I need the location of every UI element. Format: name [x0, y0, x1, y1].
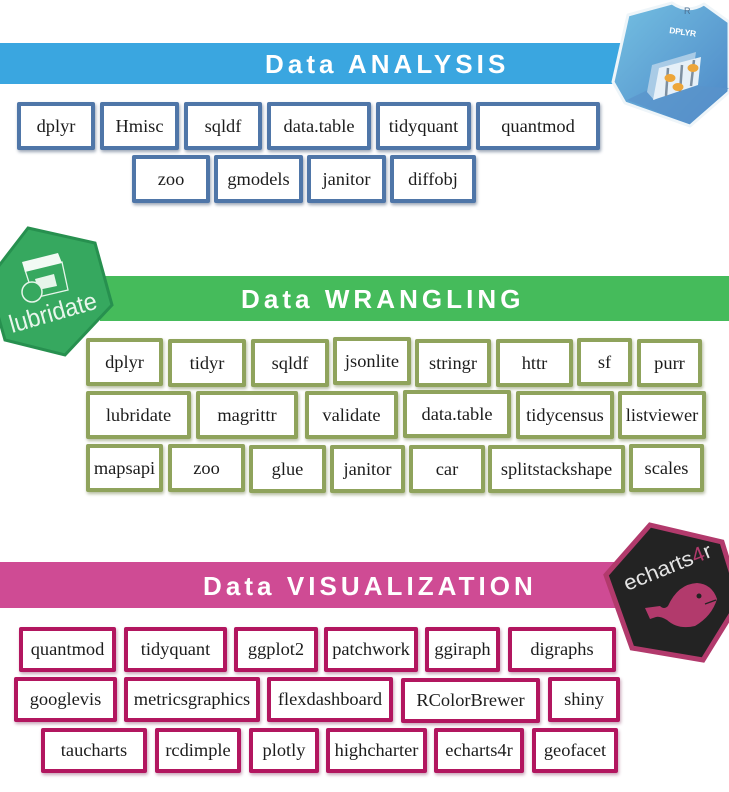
panel: analysis packages: quantmod [501, 116, 575, 136]
heading: data visualization: Data VISUALIZATION [203, 571, 537, 601]
panel: wrangling packages: scales [645, 458, 688, 478]
panel: visualization packages: digraphs [530, 639, 594, 659]
panel: analysis packages: zoo [158, 168, 184, 188]
panel: visualization packages: geofacet [544, 740, 606, 760]
panel: visualization packages: googlevis [30, 689, 101, 709]
panel: wrangling packages: sf [598, 352, 611, 372]
panel: analysis packages: Hmisc [115, 116, 164, 136]
panel: visualization packages: quantmod [31, 639, 104, 659]
panel: visualization packages: patchwork [332, 639, 410, 659]
panel: analysis packages: data.table [284, 116, 354, 136]
panel: visualization packages: ggiraph [434, 639, 491, 659]
panel: wrangling packages: purr [654, 352, 685, 372]
band: data visualization [0, 562, 622, 608]
panel: wrangling packages: lubridate [106, 404, 171, 424]
panel: visualization packages: ggplot2 [248, 639, 304, 659]
panel: visualization packages: metricsgraphics [134, 689, 250, 709]
panel: visualization packages: rcdimple [165, 740, 231, 760]
panel: wrangling packages: tidyr [190, 352, 224, 372]
panel: wrangling packages: sqldf [272, 352, 308, 372]
panel: wrangling packages [85, 337, 709, 497]
heading: data analysis: Data ANALYSIS [265, 49, 509, 79]
logo: lubridate hexagon: lubridate [6, 287, 100, 339]
panel: analysis packages: gmodels [227, 168, 290, 188]
panel: wrangling packages: validate [322, 404, 381, 424]
panel: visualization packages [13, 627, 623, 777]
panel: wrangling packages: dplyr [105, 352, 144, 372]
panel: wrangling packages: car [436, 458, 458, 478]
panel: analysis packages: dplyr [37, 116, 75, 136]
panel: visualization packages: taucharts [61, 740, 127, 760]
panel: wrangling packages: zoo [193, 458, 220, 478]
panel: analysis packages: sqldf [205, 116, 241, 136]
logo: echarts4r hexagon: echarts4r [620, 539, 715, 596]
panel: wrangling packages: stringr [429, 352, 477, 372]
panel: visualization packages: flexdashboard [278, 689, 382, 709]
logo: dplyr hexagon: DPLYR [669, 25, 697, 39]
panel: wrangling packages: httr [522, 352, 547, 372]
panel: wrangling packages: jsonlite [345, 350, 399, 370]
band: data wrangling [100, 276, 729, 321]
panel: visualization packages: plotly [263, 740, 305, 760]
panel: wrangling packages: data.table [422, 404, 492, 424]
panel: visualization packages: shiny [564, 689, 604, 709]
panel: wrangling packages: mapsapi [94, 458, 155, 478]
heading: data wrangling: Data WRANGLING [241, 284, 524, 314]
panel: analysis packages [16, 102, 603, 207]
logo: dplyr hexagon: R [684, 6, 691, 16]
panel: wrangling packages: janitor [343, 458, 392, 478]
panel: analysis packages: diffobj [408, 168, 458, 188]
panel: analysis packages: tidyquant [389, 116, 458, 136]
panel: visualization packages: RColorBrewer [416, 690, 525, 710]
panel: wrangling packages: splitstackshape [501, 458, 612, 478]
panel: visualization packages: highcharter [335, 740, 418, 760]
panel: wrangling packages: glue [272, 458, 303, 478]
panel: wrangling packages: tidycensus [526, 404, 604, 424]
panel: visualization packages: echarts4r [445, 740, 513, 760]
panel: analysis packages: janitor [322, 168, 370, 188]
band: data analysis [0, 43, 622, 84]
panel: wrangling packages: listviewer [626, 404, 698, 424]
panel: wrangling packages: magrittr [217, 404, 277, 424]
panel: visualization packages: tidyquant [141, 639, 210, 659]
